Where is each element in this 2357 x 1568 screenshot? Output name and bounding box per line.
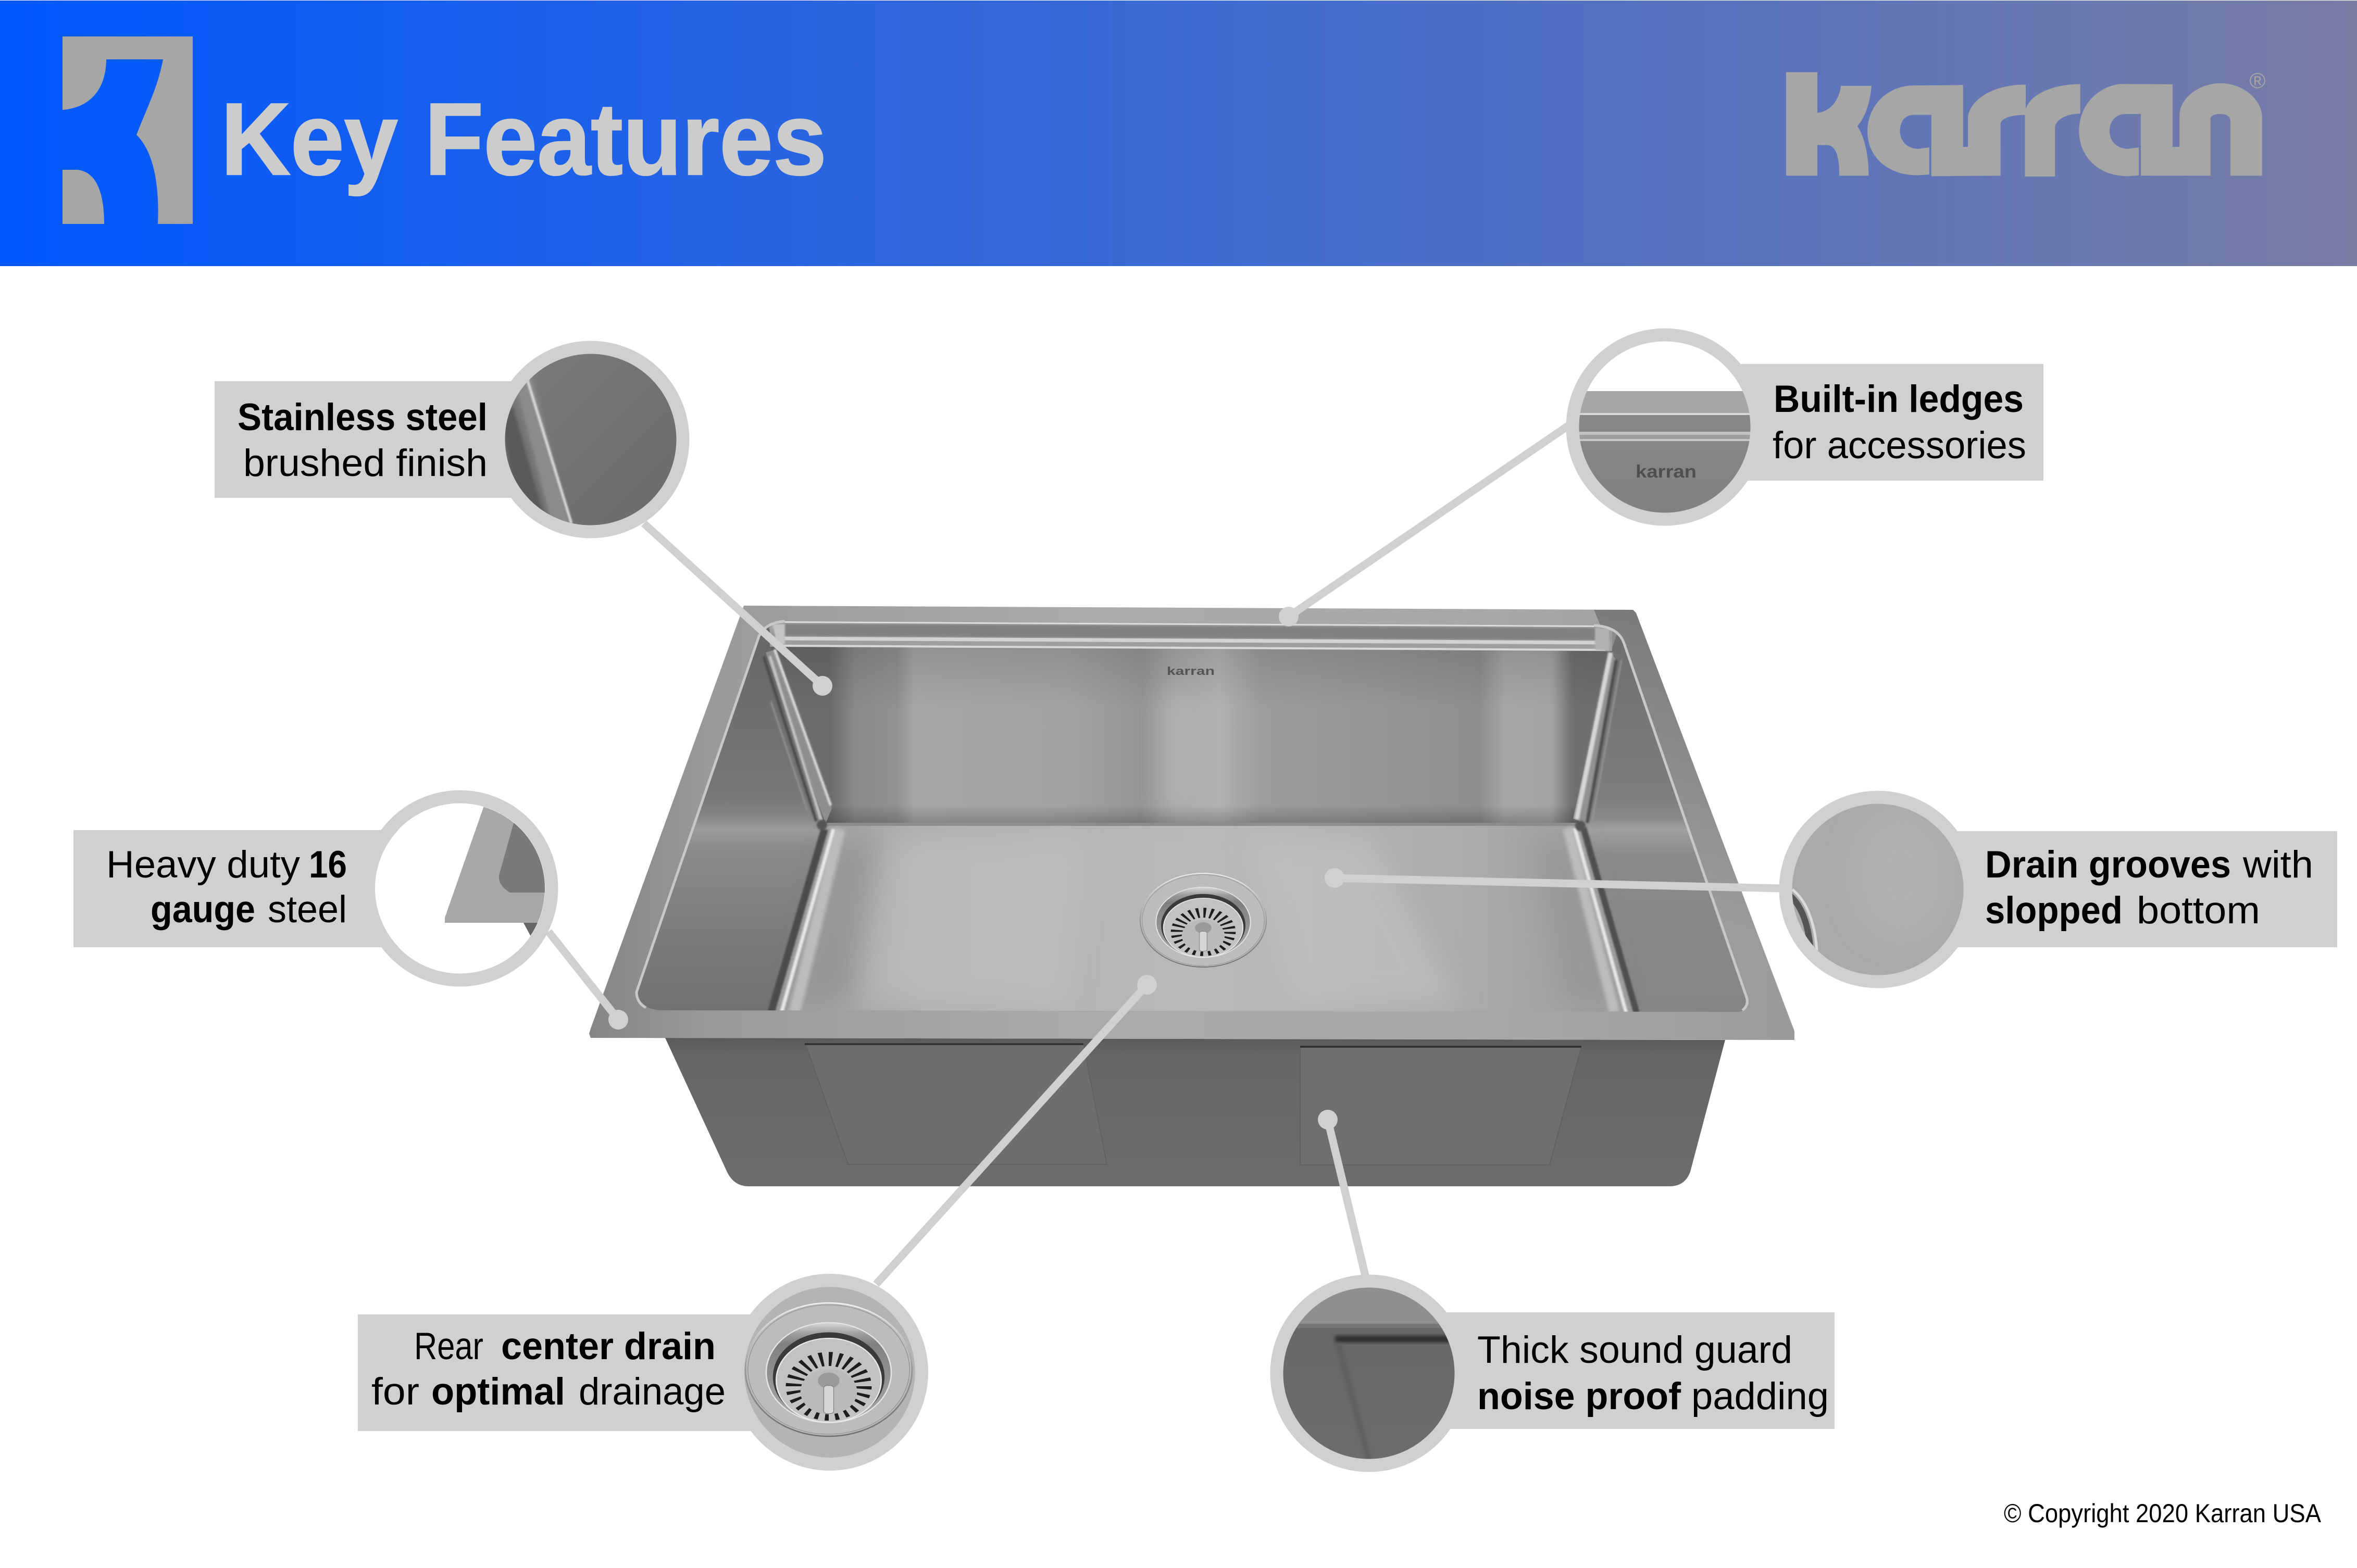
connector: heavy duty gauge (548, 932, 628, 1030)
callout: built-in ledges (1573, 335, 2043, 537)
inset ring (1573, 335, 1757, 519)
label text: bottom (2137, 889, 2260, 932)
sink top rim (589, 606, 1794, 1040)
label box (73, 830, 460, 947)
connector: rear center drain (876, 975, 1157, 1284)
connector: drain grooves (1325, 868, 1782, 888)
label box (1665, 364, 2043, 481)
inset ring (1277, 1281, 1461, 1465)
label text: noise proof (1477, 1375, 1681, 1418)
left wall (638, 628, 820, 1010)
connector lines and anchor dots (548, 426, 1782, 1284)
callout: rear center drain (358, 1280, 922, 1464)
label box (1369, 1312, 1835, 1429)
sink basin (625, 614, 1771, 1021)
callout: heavy duty 16 gauge steel (73, 797, 552, 980)
label text: Stainless steel (238, 396, 488, 438)
label box (1878, 831, 2337, 947)
back wall (771, 647, 1612, 823)
title: Key Features (221, 82, 827, 196)
bright rim edge (637, 621, 1747, 1010)
stamped karran mark: karran (1636, 462, 1697, 482)
label text: optimal (431, 1371, 565, 1413)
label text: steel (268, 888, 347, 931)
label text: for (371, 1371, 419, 1413)
connector: stainless steel (644, 523, 832, 696)
label text: Heavy duty (106, 844, 300, 886)
connector: sound guard (1318, 1110, 1365, 1275)
label text: Built-in ledges (1774, 378, 2024, 420)
built-in ledge (770, 622, 1612, 651)
label text (371, 1325, 726, 1413)
label text: Drain grooves (1985, 844, 2231, 886)
corner seams and floor channels (762, 648, 1640, 1012)
icon: sink drain strainer (1140, 873, 1266, 967)
inset ring (368, 797, 552, 980)
copyright notice: © Copyright 2020 Karran USA (2004, 1499, 2322, 1528)
sink photo illustration (589, 606, 1794, 1186)
label text: for accessories (1773, 424, 2026, 467)
label text (238, 396, 488, 484)
label text (1985, 844, 2313, 932)
inset photo: drain close-up (740, 1281, 922, 1463)
label text: brushed finish (243, 442, 488, 484)
label text: slopped (1985, 889, 2123, 932)
inset ring (1786, 797, 1970, 982)
label box (215, 381, 591, 498)
label text: padding (1691, 1375, 1829, 1418)
label text: with (2242, 844, 2313, 886)
header band (0, 1, 2357, 266)
sink underside with sound guard pads (665, 1038, 1725, 1186)
inset photo: sloped floor (1787, 797, 1969, 979)
label text: Rear (414, 1325, 483, 1368)
brushed steel reflections (809, 841, 1597, 999)
label text: center drain (501, 1325, 716, 1368)
label box (358, 1314, 830, 1431)
inset photo: ledge (1573, 338, 1755, 537)
callout: stainless steel brushed finish (215, 347, 683, 532)
connector: built-in ledges (1279, 426, 1568, 626)
label text: 16 (309, 844, 347, 886)
label text: gauge (151, 888, 255, 931)
right wall (1580, 634, 1742, 1012)
label text (106, 844, 347, 931)
sink floor (768, 826, 1637, 1013)
label text (1477, 1329, 1829, 1418)
label text: drainage (579, 1371, 726, 1413)
inset ring (738, 1280, 922, 1464)
inset photo: sink corner (370, 797, 552, 979)
logo: karran wordmark (1786, 68, 2266, 177)
sink stamped logo: karran (1167, 664, 1215, 678)
logo: karran wordmark: ® (2250, 68, 2266, 93)
label text (1773, 378, 2026, 467)
inset photo: brushed steel (500, 349, 682, 531)
callout: thick sound guard noise proof padding (1276, 1281, 1835, 1469)
inset ring (498, 347, 683, 532)
label text: Thick sound guard (1477, 1329, 1792, 1371)
inset photo: padding (1276, 1281, 1464, 1469)
icon: Karran K monogram (63, 36, 193, 224)
callout: drain grooves with slopped bottom (1786, 797, 2337, 982)
